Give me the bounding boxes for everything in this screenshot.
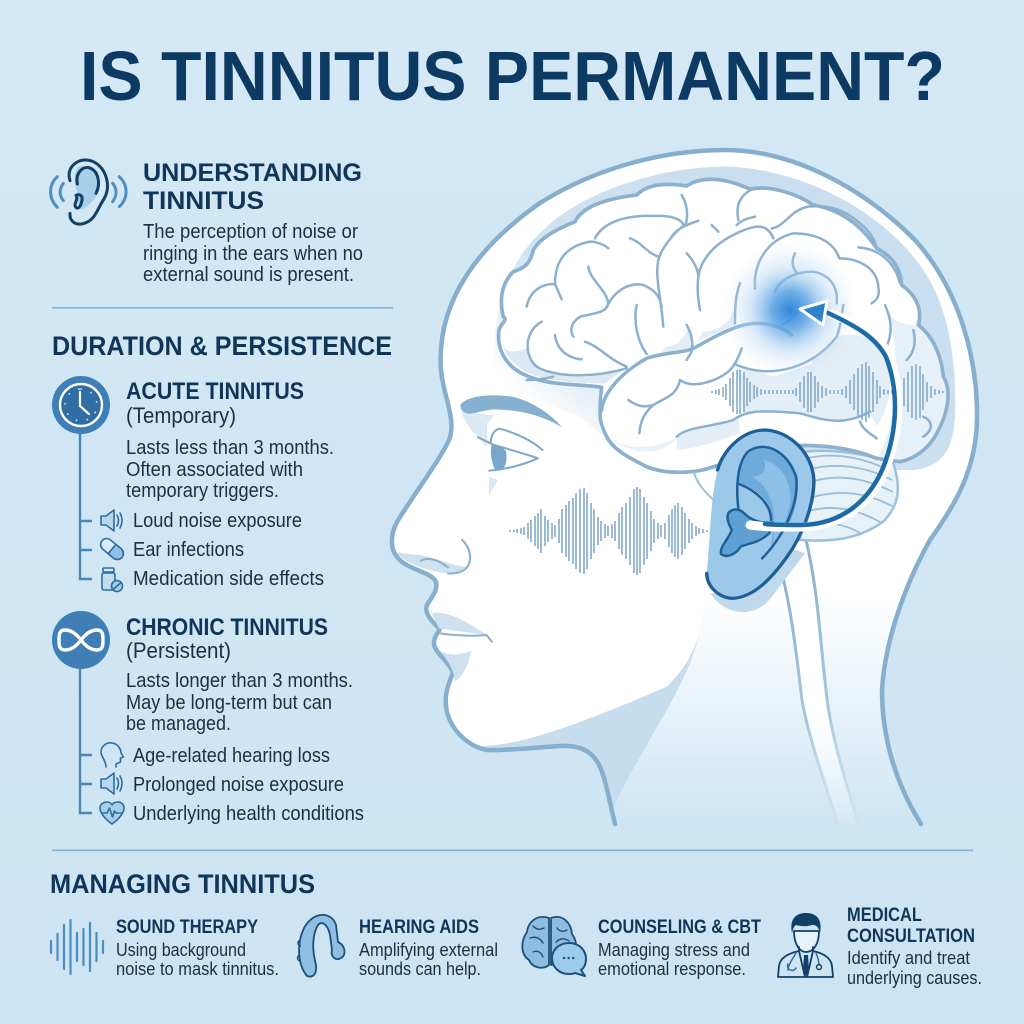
trigger: medication: Medication side effects	[133, 568, 324, 590]
section heading: managing tinnitus: MANAGING TINNITUS	[50, 869, 315, 899]
ear	[694, 430, 814, 612]
spinal cord	[780, 540, 858, 824]
heading: TINNITUS	[143, 187, 264, 215]
text	[847, 905, 982, 988]
text: Identify and treat	[847, 948, 970, 968]
text	[359, 917, 498, 979]
heading	[143, 159, 362, 215]
trigger: loud noise: Loud noise exposure	[133, 510, 302, 532]
text: CONSULTATION	[847, 926, 975, 947]
text: noise to mask tinnitus.	[116, 959, 279, 979]
heading: CHRONIC TINNITUS	[126, 614, 328, 641]
panel: medical consultation	[778, 905, 982, 988]
text: emotional response.	[598, 959, 746, 979]
temporal lower pale band	[677, 335, 890, 450]
panel: hearing aids	[297, 915, 498, 979]
temporal lobe	[602, 323, 813, 451]
face waveform	[510, 487, 715, 575]
trigger: ear infections: Ear infections	[133, 539, 244, 561]
description: May be long-term but can	[126, 692, 332, 714]
jaw shadow	[470, 613, 703, 810]
icon: ear with sound waves	[51, 160, 126, 224]
text: SOUND THERAPY	[116, 917, 258, 938]
description: Lasts longer than 3 months.	[126, 670, 353, 692]
frontal lower shading	[503, 347, 627, 383]
description: temporary triggers.	[126, 480, 279, 502]
face highlight	[436, 613, 703, 746]
pale occipital shading	[878, 310, 946, 460]
nose and lips	[396, 540, 492, 682]
description: be managed.	[126, 713, 231, 735]
icon: infinity	[52, 611, 110, 669]
title: IS TINNITUS PERMANENT?	[80, 37, 945, 115]
cerebrum outline repeat	[499, 179, 948, 462]
description: Lasts less than 3 months.	[126, 437, 334, 459]
icon: clock	[52, 376, 110, 434]
text: MEDICAL	[847, 905, 922, 926]
head outline	[392, 150, 977, 824]
section heading: duration & persistence: DURATION & PERSISTENCE	[52, 331, 392, 361]
section: understanding tinnitus	[51, 159, 363, 286]
arrow: ear to brain	[750, 301, 898, 527]
illustration: head profile with brain	[392, 150, 977, 824]
sulci	[527, 189, 931, 438]
description: external sound is present.	[143, 264, 354, 286]
cause: age-related hearing loss: Age-related hearing loss	[133, 745, 330, 767]
heading: ACUTE TINNITUS	[126, 378, 304, 405]
text: Using background	[116, 940, 246, 960]
heading: UNDERSTANDING	[143, 159, 362, 187]
text: Amplifying external	[359, 940, 498, 960]
text: HEARING AIDS	[359, 917, 479, 938]
description: ringing in the ears when no	[143, 243, 363, 265]
trigger: ear infections	[98, 536, 244, 562]
panel: acute tinnitus	[52, 376, 334, 592]
head silhouette fill	[392, 150, 977, 824]
panel: counseling and CBT	[522, 917, 761, 979]
heading	[126, 378, 304, 428]
brain activity glow	[722, 242, 858, 378]
text: underlying causes.	[847, 968, 982, 988]
description: The perception of noise or	[143, 221, 358, 243]
icon: sound waves	[51, 920, 103, 974]
heading: (Persistent)	[126, 638, 231, 663]
panel: chronic tinnitus	[52, 611, 364, 825]
panel: sound therapy	[51, 917, 279, 979]
description	[126, 437, 334, 502]
text: Managing stress and	[598, 940, 750, 960]
timeline connector	[80, 665, 92, 813]
text	[116, 917, 279, 979]
cause: prolonged noise: Prolonged noise exposure	[133, 774, 344, 796]
skull inner band	[493, 167, 955, 470]
eye and brow	[460, 395, 562, 496]
description: Often associated with	[126, 459, 303, 481]
heading	[126, 614, 328, 663]
icon: brain with speech bubble	[522, 917, 586, 976]
description	[126, 670, 353, 735]
icon: hearing aid	[297, 915, 345, 977]
icon: doctor	[778, 913, 833, 977]
timeline connector	[80, 430, 92, 579]
text: sounds can help.	[359, 959, 481, 979]
description	[143, 221, 363, 286]
brain waveform	[712, 362, 943, 422]
text	[598, 917, 761, 979]
cerebellum	[800, 451, 898, 541]
heading: (Temporary)	[126, 403, 236, 428]
cause: underlying health: Underlying health conditions	[133, 803, 364, 825]
cerebrum	[499, 179, 948, 472]
brain	[499, 179, 948, 472]
text: COUNSELING & CBT	[598, 917, 761, 938]
